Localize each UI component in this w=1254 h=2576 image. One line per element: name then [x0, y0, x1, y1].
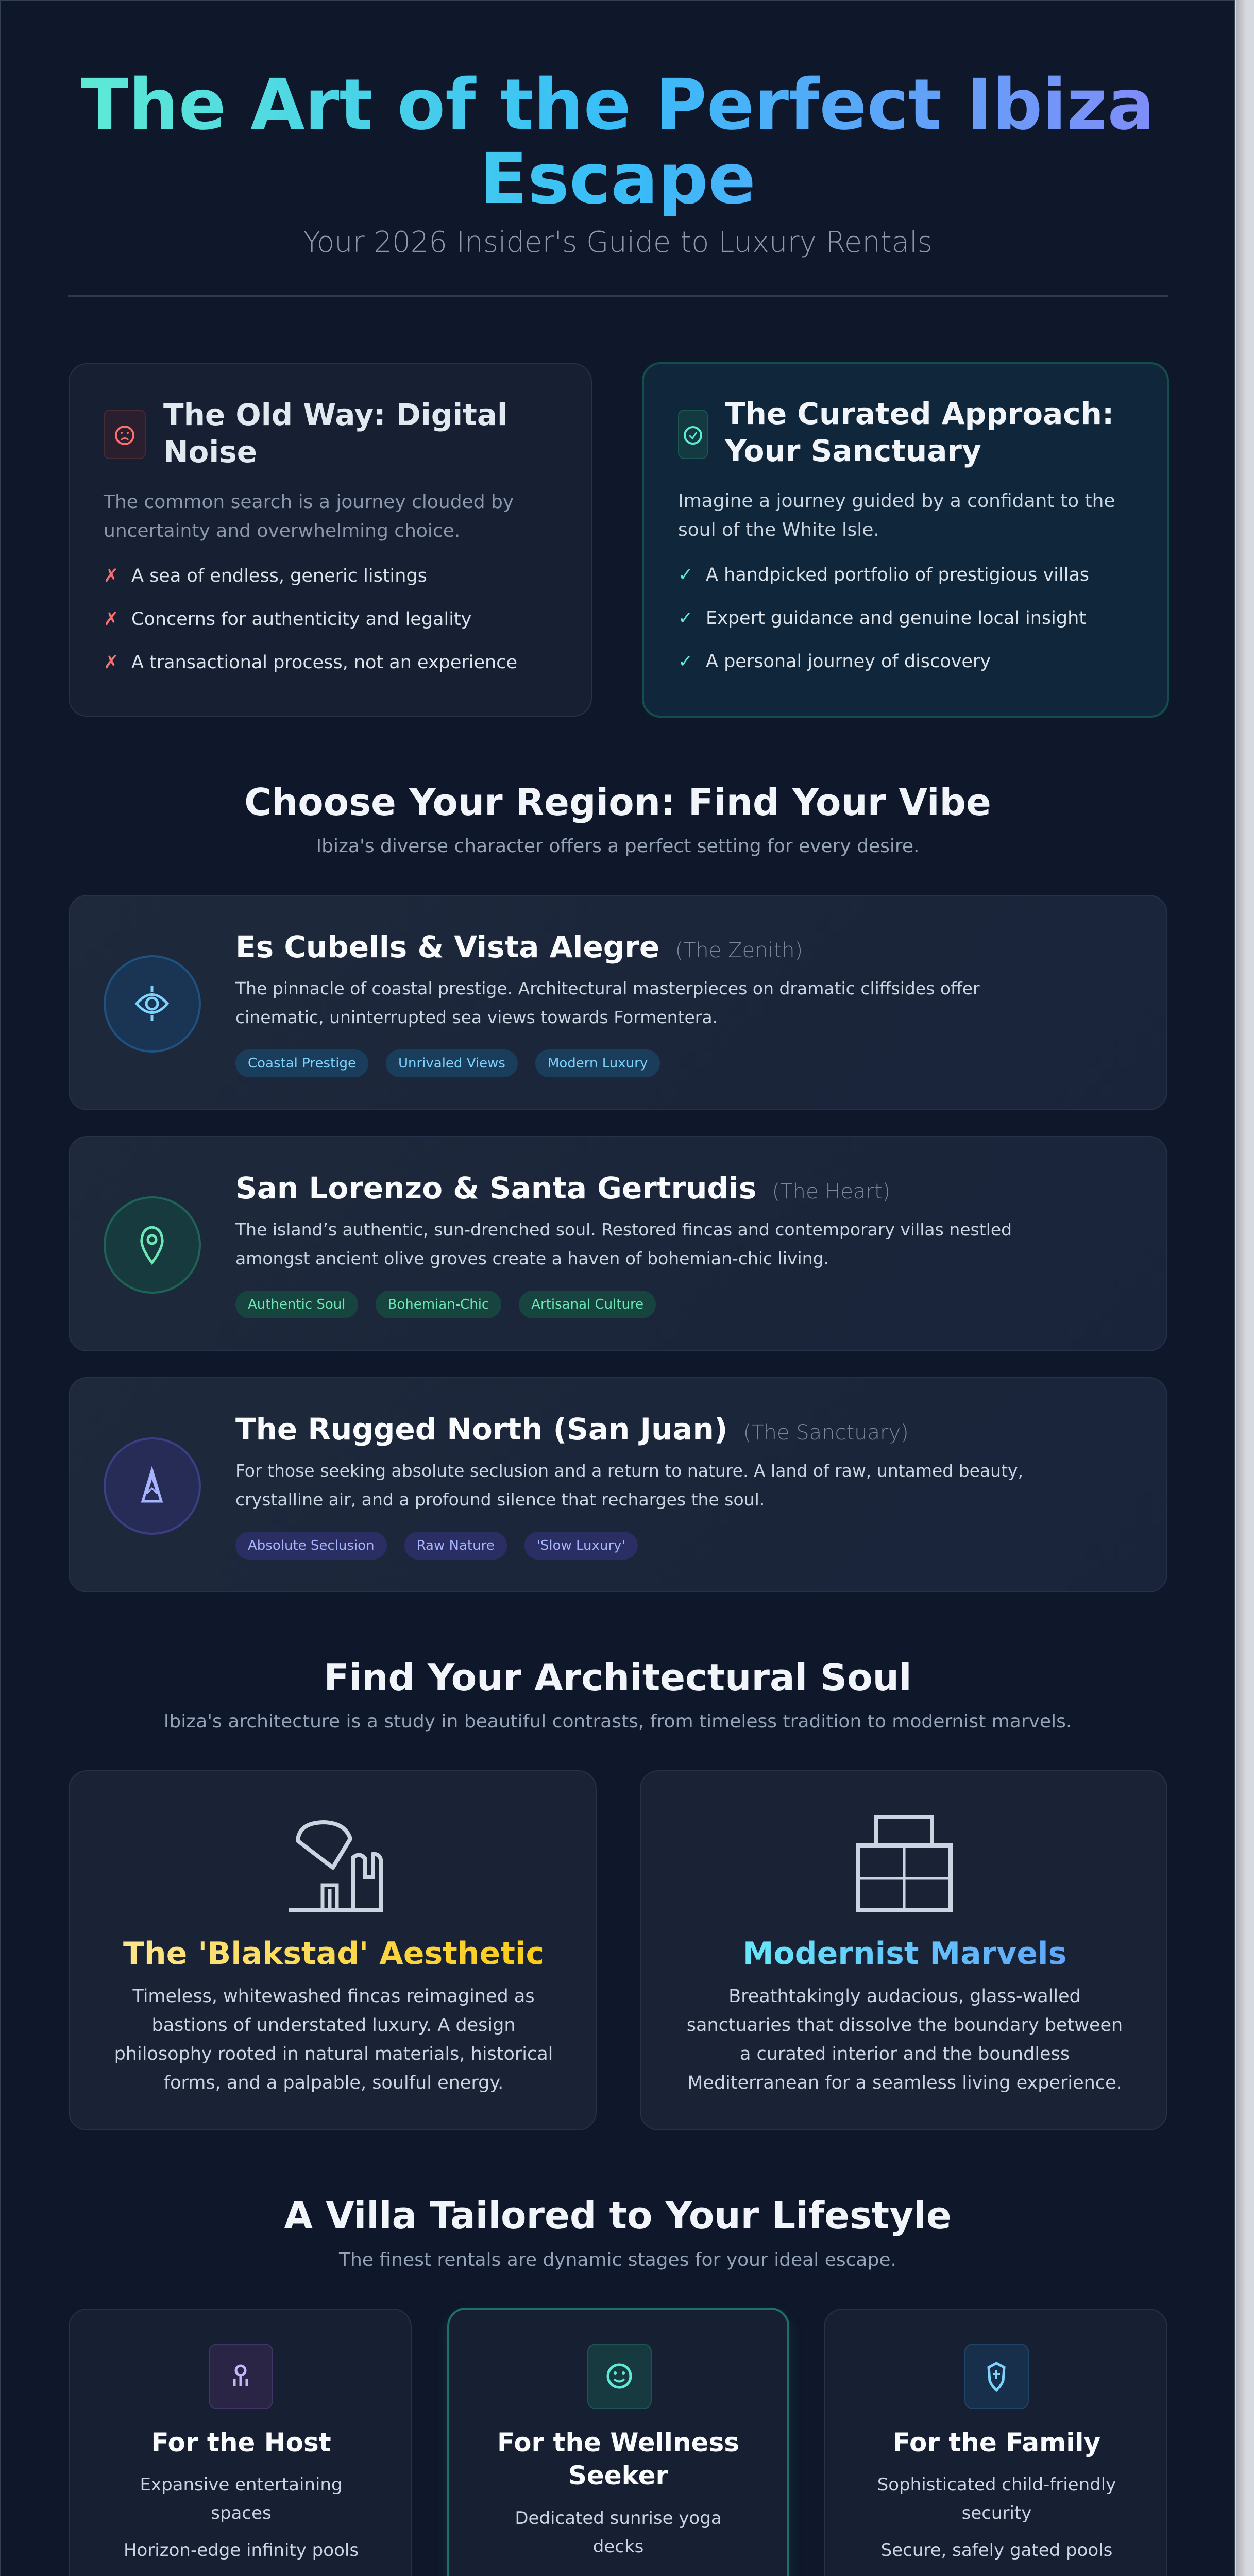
list: A transactional process, not an experience — [131, 652, 517, 673]
list: ✓ — [678, 565, 693, 585]
description: philosophy rooted in natural materials, historical — [114, 2044, 553, 2064]
list — [678, 565, 1089, 672]
icon: sad face — [104, 410, 146, 459]
icon: map pin — [104, 1196, 201, 1294]
text: The common search is a journey clouded by — [104, 492, 514, 513]
heading: The Old Way: Digital — [163, 397, 507, 432]
title: The Art of the Perfect Ibiza — [81, 64, 1155, 146]
title: Escape — [480, 139, 756, 220]
description — [114, 1986, 553, 2093]
description: For those seeking absolute seclusion and a return to nature. A land of raw, untamed beauty, — [235, 1461, 1023, 1481]
heading: Seeker — [568, 2461, 668, 2490]
icon: smile — [587, 2344, 652, 2409]
list: ✓ — [678, 651, 693, 672]
list: Expert guidance and genuine local insight — [706, 608, 1086, 629]
icon: shield — [964, 2344, 1029, 2409]
title: Es Cubells & Vista Alegre (The Zenith) — [235, 929, 803, 964]
heading: The Curated Approach: — [725, 396, 1114, 431]
list: A handpicked portfolio of prestigious villas — [706, 565, 1089, 585]
heading — [497, 2428, 739, 2490]
list: security — [962, 2503, 1031, 2523]
text — [678, 490, 1115, 540]
list: spaces — [211, 2503, 272, 2523]
tags: Coastal Prestige — [248, 1056, 356, 1071]
panel: San Lorenzo — [69, 1136, 1167, 1351]
list — [104, 566, 517, 673]
list: ✗ — [104, 652, 118, 673]
description: forms, and a palpable, soulful energy. — [164, 2073, 503, 2093]
text — [103, 492, 514, 541]
list: decks — [593, 2536, 643, 2557]
description: Breathtakingly audacious, glass-walled — [728, 1986, 1081, 2007]
text: uncertainty and overwhelming choice. — [104, 520, 460, 541]
description: sanctuaries that dissolve the boundary between — [687, 2015, 1123, 2036]
subtitle: Your 2026 Insider's Guide to Luxury Rentals — [303, 226, 933, 259]
heading: The 'Blakstad' Aesthetic — [123, 1936, 544, 1972]
tags — [235, 1049, 660, 1077]
panel: Es Cubells — [69, 895, 1167, 1110]
list: Dedicated sunrise yoga — [515, 2508, 722, 2529]
text: Imagine a journey guided by a confidant to the — [678, 490, 1115, 512]
tags: Raw Nature — [417, 1538, 495, 1553]
panel: wellness — [447, 2308, 789, 2576]
text: soul of the White Isle. — [678, 519, 879, 540]
tags: Authentic Soul — [248, 1297, 346, 1312]
description: Mediterranean for a seamless living experience. — [687, 2073, 1122, 2093]
panel: curated — [642, 362, 1169, 718]
list: ✗ — [104, 566, 118, 586]
description — [235, 978, 980, 1027]
description — [235, 1461, 1023, 1510]
description — [235, 1219, 1012, 1268]
panel: Blakstad — [69, 1770, 597, 2130]
icon: check circle — [678, 410, 708, 459]
description: a curated interior and the boundless — [740, 2044, 1070, 2064]
list: Horizon-edge infinity pools — [124, 2540, 359, 2561]
list: ✗ — [104, 609, 118, 630]
heading — [724, 396, 1114, 468]
panel: old way — [69, 363, 592, 717]
subheading: architecture: Ibiza's architecture is a study in beautiful contrasts, from timeless tradition to modernist marvels. — [164, 1711, 1072, 1732]
tags: Artisanal Culture — [531, 1297, 643, 1312]
description: cinematic, uninterrupted sea views towards Formentera. — [235, 1007, 718, 1027]
subheading: lifestyle: The finest rentals are dynamic stages for your ideal escape. — [339, 2249, 896, 2270]
tags: 'Slow Luxury' — [537, 1538, 625, 1553]
tags: Modern Luxury — [548, 1056, 648, 1071]
description: amongst ancient olive groves create a haven of bohemian-chic living. — [235, 1248, 829, 1268]
description — [687, 1986, 1123, 2093]
description: The island’s authentic, sun-drenched soul. Restored fincas and contemporary villas nestled — [235, 1219, 1012, 1240]
subheading: regions: Ibiza's diverse character offers a perfect setting for every desire. — [316, 836, 919, 857]
list: Secure, safely gated pools — [881, 2540, 1112, 2561]
heading: regions: Choose Your Region: Find Your Vibe — [244, 781, 991, 824]
icon: glass building — [856, 1815, 953, 1912]
heading: lifestyle: A Villa Tailored to Your Lifestyle — [284, 2194, 952, 2237]
description: crystalline air, and a profound silence that recharges the soul. — [235, 1489, 765, 1510]
list: A personal journey of discovery — [706, 651, 991, 672]
heading: For the Host — [151, 2428, 331, 2458]
title: The Rugged North (San Juan) (The Sanctuary) — [235, 1412, 909, 1447]
heading: For the Wellness — [497, 2428, 739, 2458]
description: Timeless, whitewashed fincas reimagined as — [132, 1986, 535, 2007]
heading: Modernist Marvels — [743, 1936, 1066, 1972]
tags — [235, 1532, 638, 1560]
tags: Absolute Seclusion — [248, 1538, 375, 1553]
description: bastions of understated luxury. A design — [151, 2015, 515, 2036]
panel: host — [69, 2309, 412, 2576]
panel: family — [824, 2309, 1167, 2576]
panel: Rugged North — [69, 1377, 1167, 1592]
list: ✓ — [678, 608, 693, 629]
icon: eye — [104, 955, 201, 1053]
list: Concerns for authenticity and legality — [131, 609, 471, 630]
list — [490, 2508, 746, 2576]
icon: host — [209, 2344, 273, 2409]
title — [0, 68, 1235, 216]
list — [877, 2475, 1116, 2561]
description: The pinnacle of coastal prestige. Architectural masterpieces on dramatic cliffsides offer — [235, 978, 980, 998]
list: Expansive entertaining — [140, 2475, 342, 2495]
heading: Your Sanctuary — [725, 433, 981, 468]
heading: For the Family — [893, 2428, 1100, 2458]
icon: mountain — [104, 1437, 201, 1535]
tags: Unrivaled Views — [398, 1056, 505, 1071]
tags — [235, 1291, 656, 1318]
list: A sea of endless, generic listings — [131, 566, 427, 586]
tags: Bohemian-Chic — [388, 1297, 489, 1312]
list — [124, 2475, 359, 2561]
heading — [163, 397, 507, 469]
icon: finca — [289, 1820, 383, 1912]
panel: Modernist — [640, 1770, 1167, 2130]
list: Sophisticated child-friendly — [877, 2475, 1116, 2495]
heading: architecture: Find Your Architectural Soul — [324, 1656, 912, 1699]
title: San Lorenzo & Santa Gertrudis (The Heart) — [235, 1171, 890, 1206]
heading: Noise — [163, 434, 257, 469]
